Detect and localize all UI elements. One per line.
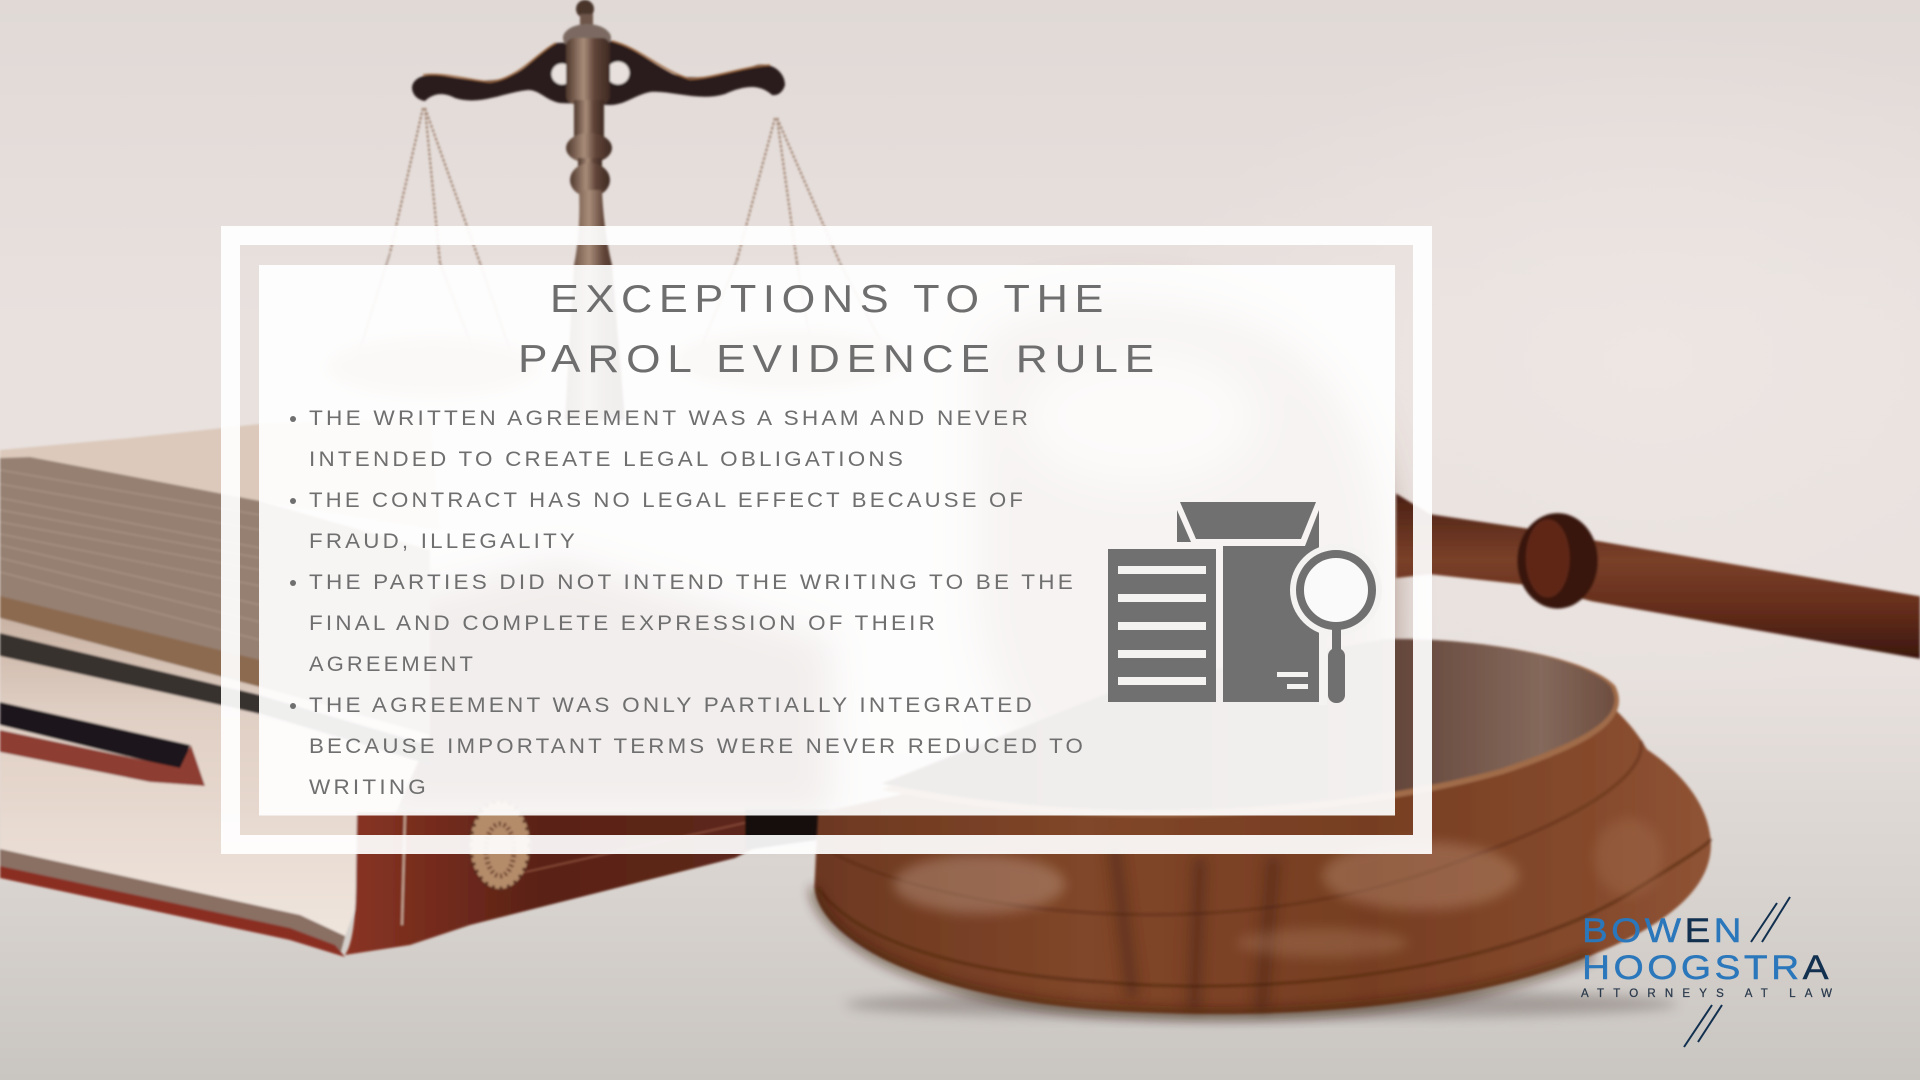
logo: Bowen Hoogstra Attorneys at Law xyxy=(1581,897,1832,1047)
bullet list of exceptions: THE PARTIES DID NOT INTEND THE WRITING TO BE THE xyxy=(309,571,1076,594)
scales of justice xyxy=(328,0,905,420)
icon: documents and envelope with magnifying glass xyxy=(1108,502,1382,705)
logo: Bowen Hoogstra Attorneys at Law: HOOGSTR A xyxy=(1582,949,1832,987)
bullet list of exceptions: FINAL AND COMPLETE EXPRESSION OF THEIR xyxy=(309,612,938,635)
title xyxy=(518,278,1161,381)
bullet list of exceptions: WRITING xyxy=(309,776,429,799)
bullet list of exceptions: BECAUSE IMPORTANT TERMS WERE NEVER REDUCED TO xyxy=(309,735,1086,758)
gavel base and handle xyxy=(814,493,1920,1019)
bullet list of exceptions: AGREEMENT xyxy=(309,653,476,676)
bullet list of exceptions xyxy=(290,407,1086,799)
bullet list of exceptions: THE CONTRACT HAS NO LEGAL EFFECT BECAUSE OF xyxy=(309,489,1026,512)
bullet list of exceptions: THE WRITTEN AGREEMENT WAS A SHAM AND NEVER xyxy=(309,407,1031,430)
title: EXCEPTIONS TO THE xyxy=(550,278,1110,321)
bullet list of exceptions: INTENDED TO CREATE LEGAL OBLIGATIONS xyxy=(309,448,906,471)
logo: Bowen Hoogstra Attorneys at Law: ATTORNEYS AT LAW xyxy=(1581,988,1832,1000)
gavel head behind panel xyxy=(980,305,1384,786)
panel: inner translucent text card xyxy=(259,265,1395,816)
bullet list of exceptions: FRAUD, ILLEGALITY xyxy=(309,530,578,553)
law book xyxy=(0,418,830,957)
panel: outer translucent frame xyxy=(221,226,1432,854)
bullet list of exceptions: THE AGREEMENT WAS ONLY PARTIALLY INTEGRATED xyxy=(309,694,1035,717)
title: PAROL EVIDENCE RULE xyxy=(518,338,1161,381)
logo: Bowen Hoogstra Attorneys at Law: BOW EN xyxy=(1582,912,1745,950)
